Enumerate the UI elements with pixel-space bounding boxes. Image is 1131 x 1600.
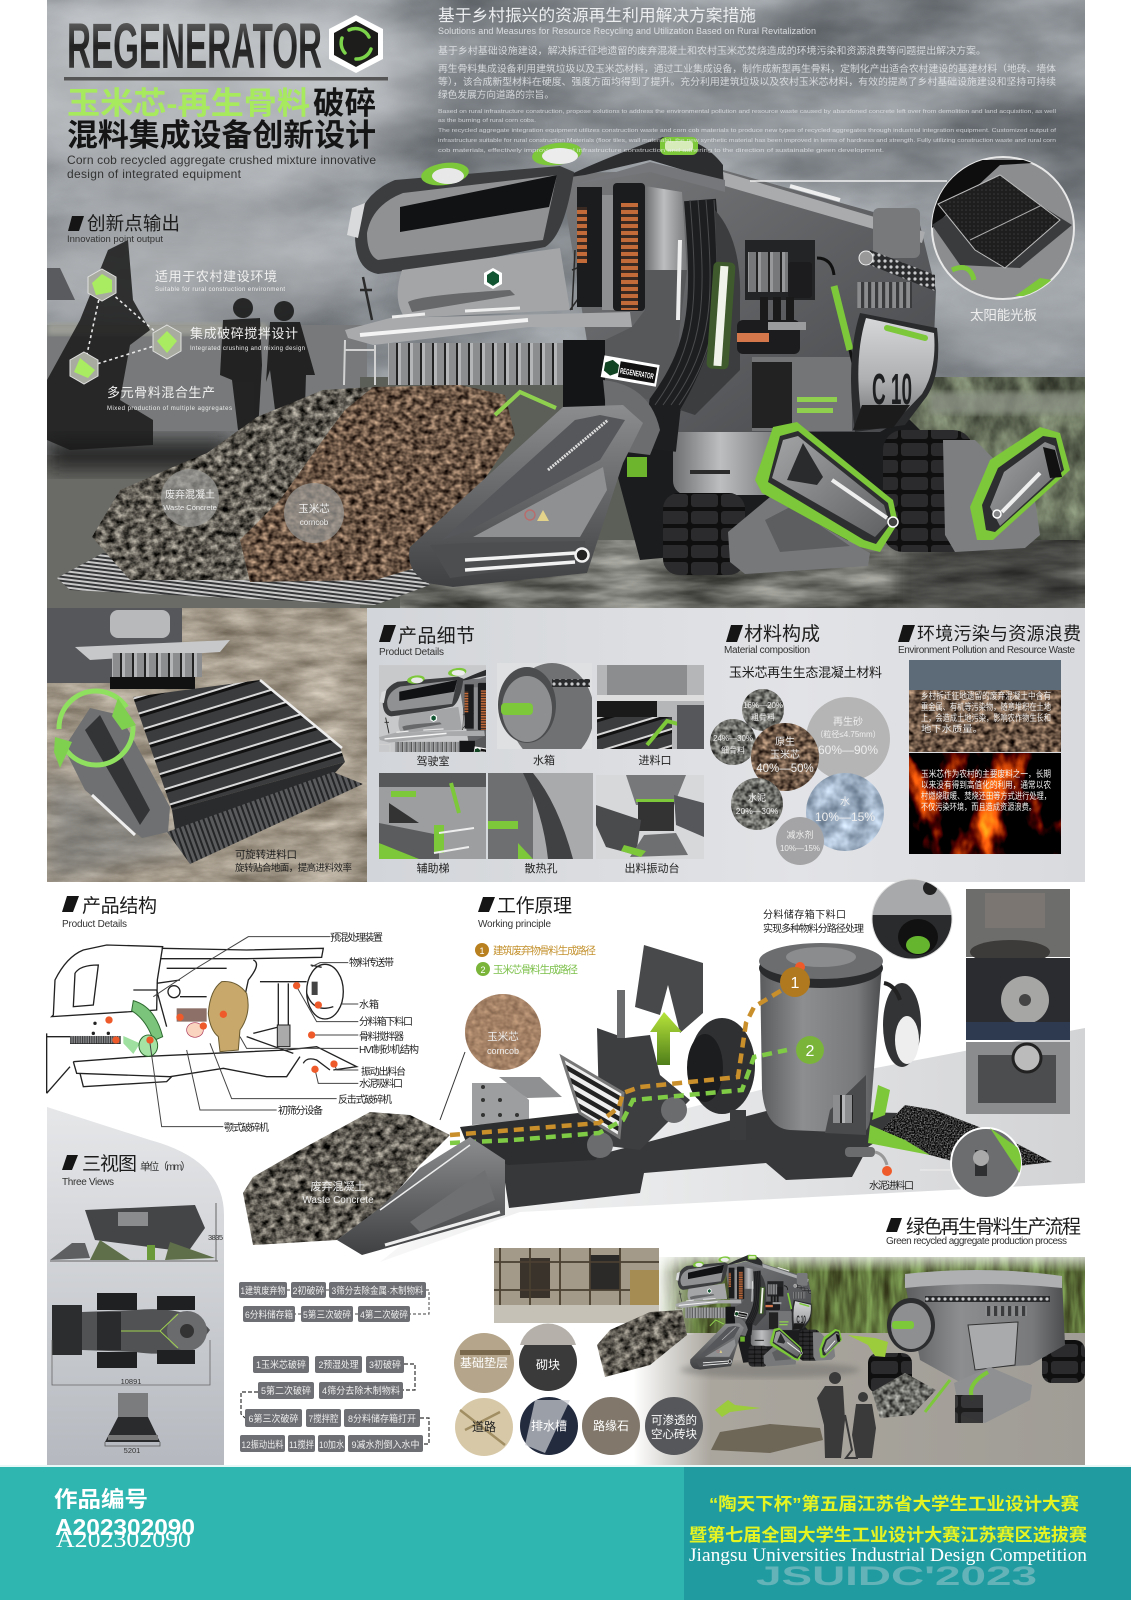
heading: working principle: 工作原理 (497, 895, 572, 917)
green discharge piece (872, 1085, 890, 1120)
gravel output (872, 1105, 1052, 1170)
competition title: 暨第七届全国大学生工业设计大赛江苏赛区选拔赛 (689, 1525, 1088, 1545)
circle: fine aggregate: 细骨料 (721, 745, 745, 755)
photo: demolition waste: 地下水质量。 (921, 723, 983, 734)
water panel (887, 1298, 935, 1352)
circle: water: 水 (840, 796, 850, 808)
circle: water reducer: 减水剂 (786, 829, 814, 840)
material title: 玉米芯再生生态混凝土材料 (729, 665, 882, 680)
circle: fine aggregate: 24%—30% (713, 734, 753, 743)
caption: rotating inlet: 旋转贴合地面，提高进料效率 (235, 862, 352, 874)
photo: burning corn cobs: 村燃烧取暖、焚烧还田等方式进行处理， (921, 790, 1051, 801)
side water wheel (883, 983, 921, 1067)
flow: corn cob process: 5第二次破碎 (261, 1385, 311, 1397)
striped chute (562, 1057, 623, 1137)
flow: corn cob process: 9减水剂倒入水中 (352, 1439, 420, 1451)
right track (1042, 1340, 1085, 1383)
point 3 text: 多元骨料混合生产 (107, 385, 215, 400)
circle: cement: 20%—30% (736, 806, 779, 816)
heading: three views: 三视图 (82, 1153, 137, 1175)
heading: product structure: 产品结构 (82, 895, 157, 917)
arrow: green transfer 1 (848, 1335, 888, 1357)
subtitle english (67, 153, 376, 181)
label circle: corncob: corncob (300, 518, 329, 527)
thumbnail: inlet: 进料口 (638, 753, 672, 767)
drawing: front view (105, 1393, 160, 1455)
water inlet pipe (845, 1147, 892, 1176)
heading: three views (62, 1153, 191, 1188)
thumbnail: vibrating discharge (596, 775, 704, 875)
circle: drain (520, 1397, 578, 1455)
marker 2: 2 (806, 1043, 815, 1060)
competition title: “陶天下杯”第五届江苏省大学生工业设计大赛 (709, 1494, 1080, 1514)
pile: waste concrete (92, 387, 390, 580)
circle: coarse aggregate: 16%—20% (743, 701, 783, 710)
structure labels: 振动出料台 (361, 1065, 406, 1078)
conveyor plate under pile (57, 553, 430, 605)
heading: green aggregate process: Green recycled aggregate production process (886, 1236, 1067, 1247)
heading: material composition: Material composition (724, 645, 810, 656)
circle: curb stone: 路缘石 (593, 1418, 629, 1433)
label: water inlet: 水泥进料口 (869, 1179, 914, 1192)
circle: curb stone (582, 1397, 640, 1455)
perforated plates (472, 1077, 562, 1125)
point 3 text: Mixed production of multiple aggregates (107, 406, 232, 412)
circle: original corn cob: 原生 (775, 735, 795, 748)
structure labels: 反击式破碎机 (338, 1093, 392, 1106)
flow: waste concrete process (239, 1282, 429, 1322)
panel: details and materials (367, 608, 1085, 882)
heading: green aggregate process (886, 1216, 1081, 1247)
heading: environmental pollution: Environment Pollution and Resource Waste (898, 645, 1075, 656)
pile: waste concrete input: Waste Concrete (302, 1195, 374, 1206)
circle: block (519, 1324, 577, 1391)
detail: water inlet (920, 1128, 1021, 1198)
point 1 text: Suitable for rural construction environment (155, 287, 285, 293)
photo: demolition waste: 乡村拆迁征地遗留的废弃混凝土中含有 (921, 690, 1051, 701)
work number (54, 1487, 195, 1552)
text block: solutions (438, 6, 1057, 154)
point 2 text (190, 326, 305, 352)
drawing: side view (50, 1203, 223, 1261)
flow: corn cob process: 2预湿处理 (318, 1359, 359, 1371)
path: green (450, 1050, 787, 1143)
path: orange (450, 990, 782, 1135)
flow: corn cob process: 10加水 (319, 1439, 344, 1451)
pile: waste concrete input: 废弃混凝土 (310, 1179, 366, 1193)
photo 1 (966, 889, 1070, 964)
title: 混料集成设备创新设计 (67, 118, 376, 153)
pile: rubble on small machine (597, 1310, 687, 1377)
marker 2 (796, 1036, 824, 1064)
structure labels: HVI制砂机结构 (359, 1043, 419, 1056)
text block: solutions: 再生骨料集成设备利用建筑垃圾以及玉米芯材料，通过工业集成设备，制作成新型再生骨料，定制化产出适合农村建设的基建材料（地砖、墙体 (438, 63, 1057, 75)
flow: corn cob process: 11搅拌 (289, 1439, 314, 1451)
drawing: front view: 5201 (124, 1446, 140, 1455)
photo: burning corn cobs (909, 753, 1061, 854)
text block: solutions: as the burning of rural corn cobs. (438, 118, 536, 124)
flow: corn cob process: 1玉米芯破碎 (256, 1359, 306, 1371)
flow: corn cob process (240, 1356, 429, 1452)
circle: water (806, 773, 884, 851)
heading: product details: 产品细节 (398, 625, 475, 647)
flow: corn cob process: 4筛分去除木制物料 (322, 1385, 400, 1397)
heading: product details (379, 625, 475, 658)
callout: corncob sample: corncob (487, 1046, 519, 1056)
heading: environmental pollution (898, 624, 1081, 656)
panel: three views background (47, 1107, 224, 1467)
crusher housing (597, 1028, 690, 1150)
title: 破碎 (313, 86, 376, 121)
structure labels: 水泥吸料口 (359, 1077, 403, 1090)
circle: road (455, 1398, 513, 1456)
callout: corncob sample: 玉米芯 (487, 1030, 519, 1043)
work number: A202302090 (56, 1527, 191, 1552)
flow: corn cob process: 7搅拌腔 (308, 1413, 339, 1425)
innovation points (70, 269, 305, 412)
point 3 text (107, 385, 232, 412)
drawing: side view: 3835 (208, 1233, 223, 1242)
circle: original corn cob (751, 723, 819, 791)
circle: water reducer (776, 817, 824, 865)
machine: exploded work mechanism (450, 943, 1052, 1208)
thumbnail: water tank: 水箱 (533, 753, 555, 767)
text: discharge port (763, 908, 864, 935)
photo 3 (966, 1042, 1070, 1114)
subtitle english: design of integrated equipment (67, 167, 242, 181)
drawing: top view (52, 1293, 210, 1386)
circle: permeable brick: 可渗透的 (651, 1413, 697, 1427)
corn field (655, 1250, 1085, 1335)
point 1 text: 适用于农村建设环境 (155, 269, 277, 284)
photo: demolition waste (909, 660, 1061, 752)
pile: waste concrete input (243, 1112, 450, 1245)
line drawing: structure diagram (47, 937, 358, 1127)
structure labels: 水箱 (359, 998, 379, 1011)
circle: coarse aggregate (742, 689, 784, 731)
flow: corn cob process: 3初破碎 (369, 1359, 401, 1371)
scene: green process (440, 1248, 1085, 1467)
icon: green rotate ring (54, 691, 136, 768)
circle: coarse aggregate: 粗骨料 (751, 712, 775, 722)
panel: hero scene (47, 0, 1085, 608)
label circle: waste concrete: Waste Concrete (163, 503, 217, 512)
flow: corn cob process: 6第三次破碎 (248, 1413, 299, 1425)
machine: regenerator vehicle (344, 137, 1070, 587)
photo: demolition waste: 上，会造成土地污染，影响农作物生长和 (921, 712, 1051, 723)
photo 2 (966, 958, 1070, 1040)
circle: cement (731, 778, 783, 830)
point 2 text: Integrated crushing and mixing design (190, 346, 305, 352)
flow: corn cob process: 8分料储存箱打开 (348, 1413, 416, 1425)
flow: waste concrete process: 1建筑废弃物 (240, 1285, 286, 1297)
work number: A202302090 (55, 1514, 195, 1540)
structure labels: 物料传送带 (349, 956, 394, 969)
heading: innovation: 创新点输出 (87, 213, 180, 234)
flow: waste concrete process: 3筛分去除金属·木制物料 (332, 1285, 424, 1297)
icon: hexagon point 3 (70, 352, 98, 384)
footer band (0, 1465, 1131, 1600)
thumbnail: cab: 驾驶室 (416, 754, 450, 768)
title: 玉米芯-再生骨料 (67, 86, 310, 121)
circle: recycled sand: 60%—90% (818, 743, 878, 757)
circle: water: 10%—15% (815, 810, 875, 824)
feed ramp rollers (133, 680, 345, 810)
thumbnail: inlet (597, 665, 704, 767)
green arrow (650, 1012, 682, 1065)
feed arm (337, 1137, 505, 1255)
thumbnail: ladder: 辅助梯 (416, 861, 450, 875)
text block: solutions: Solutions and Measures for Resource Recycling and Utilization Based on Rural Revitalization (438, 26, 816, 36)
legend: paths: 2 (480, 965, 486, 975)
text block: solutions: Based on rural infrastructure construction, propose solutions to address the environmental pollution and resource waste caused by abandoned concrete left over from demolition and land acquisition, as well (438, 109, 1056, 115)
structure labels (224, 931, 419, 1134)
circle: fine aggregate (710, 719, 756, 765)
structure labels: 分料箱下料口 (359, 1015, 413, 1028)
subtitle english: Corn cob recycled aggregate crushed mixture innovative (67, 153, 376, 167)
legend: paths (475, 943, 596, 976)
label circle: waste concrete (161, 469, 219, 527)
competition watermark: JSUIDC'2023 (756, 1561, 1037, 1591)
side guard (64, 708, 170, 838)
label: solar panel: 太阳能光板 (970, 308, 1038, 323)
workers silhouettes (220, 298, 315, 430)
text: discharge port: 分料储存箱下料口 (763, 908, 846, 921)
marker 1: 1 (791, 975, 800, 992)
left landscape (47, 268, 387, 608)
photo: burning corn cobs: 以来没有得到高值化的利用，通常以农 (921, 779, 1051, 790)
photo: burning corn cobs: 不仅污染环境，而且造成资源浪费。 (921, 801, 1036, 812)
construction photo (494, 1248, 659, 1323)
title (67, 86, 376, 153)
tank body (904, 1273, 1065, 1385)
rubble chute (872, 1373, 936, 1418)
excavator silhouette (47, 240, 153, 450)
text block: solutions: infrastructure suitable for rural construction Materials (floor tiles, wall materials), the new synthetic material has been improved in terms of hardness and strength. Fully utilizing construction waste and rural corn (438, 138, 1056, 144)
impact crusher drum (687, 1018, 755, 1140)
heading: environmental pollution: 环境污染与资源浪费 (917, 624, 1081, 644)
ribbed mat (167, 772, 363, 864)
thumbnail: vibrating discharge: 出料振动台 (624, 861, 680, 875)
heading: product details: Product Details (379, 647, 444, 658)
heading: three views: Three Views (62, 1177, 114, 1188)
material circles (454, 1324, 703, 1456)
heading: material composition: 材料构成 (744, 623, 820, 645)
legend: paths: 玉米芯骨料生成路径 (493, 963, 578, 976)
conveyor (460, 1113, 619, 1165)
callout: solar panel (750, 157, 1085, 299)
heading: green aggregate process: 绿色再生骨料生产流程 (906, 1216, 1081, 1238)
material circles chart (710, 689, 890, 865)
heading: material composition (724, 623, 820, 656)
structure labels: 颚式破碎机 (224, 1121, 269, 1134)
work number: 作品编号 (54, 1487, 148, 1512)
circle: water reducer: 10%—15% (780, 844, 820, 853)
photo: burning corn cobs: 玉米芯作为农村的主要废料之一，长期 (921, 768, 1051, 779)
text block: solutions: 等），该合成新型材料在硬度、强度方面均得到了提升。充分利用建筑垃圾以及农村玉米芯材料，有效的提高了乡村基础设施建设和坚持可持续 (438, 76, 1057, 88)
road ground (400, 530, 1085, 618)
structure labels: 预混处理装置 (330, 931, 383, 944)
sky background (47, 0, 1085, 420)
circle: permeable brick: 空心砖块 (651, 1427, 697, 1441)
right fields (850, 377, 1085, 567)
wedge (954, 1367, 1032, 1423)
competition english: Jiangsu Universities Industrial Design Competition (689, 1545, 1088, 1566)
thumbnail: heat vents (488, 773, 593, 875)
base platform (501, 1110, 905, 1208)
icon: hexagon recycle logo (329, 15, 383, 73)
text block: solutions: 基于乡村基础设施建设，解决拆迁征地遗留的废弃混凝土和农村玉米芯焚烧造成的环境污染和资源浪费等问题提出解决方案。 (438, 45, 986, 57)
flow: waste concrete process: 5第三次破碎 (303, 1309, 351, 1321)
photo: demolition waste: 重金属、有机等污染物，随意堆积在土地 (921, 701, 1051, 712)
thumbnail: ladder (379, 773, 486, 875)
ground (440, 1320, 1085, 1467)
structure labels: 骨料搅拌器 (359, 1030, 404, 1043)
door (968, 1322, 1018, 1370)
pile: corn cob (240, 385, 515, 582)
big machine (868, 1270, 1085, 1423)
circle: recycled sand: 再生砂 (833, 715, 863, 728)
hopper (635, 945, 703, 1033)
cab front (47, 608, 230, 689)
text block: solutions: The recycled aggregate integration equipment utilizes construction waste and corn cob materials to produce new types of recycled aggregates through industrial integration equipment. Customized output of (438, 128, 1056, 134)
circle: cement: 水泥 (748, 792, 766, 803)
label circle: corncob: 玉米芯 (298, 502, 330, 515)
thumbnail: heat vents: 散热孔 (524, 861, 558, 875)
flow: waste concrete process: 2初破碎 (292, 1285, 325, 1297)
flow: corn cob process: 12振动出料 (242, 1439, 284, 1451)
circle: drain: 排水槽 (531, 1419, 567, 1433)
rubble slabs (711, 1424, 823, 1453)
heading: product structure: Product Details (62, 919, 127, 930)
heading: innovation (67, 213, 180, 245)
workers (817, 1372, 876, 1458)
heading: innovation: Innovation point output (67, 234, 163, 245)
text: discharge port: 实现多种物料分路径处理 (763, 922, 864, 935)
heading: three views: 单位（mm） (140, 1160, 191, 1173)
circle: permeable brick (645, 1397, 703, 1455)
flow: waste concrete process: 4第二次破碎 (360, 1309, 408, 1321)
caption: rotating inlet: 可旋转进料口 (235, 848, 297, 861)
structure labels: 初筛分设备 (278, 1104, 323, 1117)
text block: solutions: 绿色发展方向道路的宗旨。 (438, 89, 554, 101)
label circle: waste concrete: 废弃混凝土 (165, 488, 215, 501)
heading: working principle (478, 895, 572, 930)
circle: road: 道路 (472, 1419, 496, 1434)
callout: corncob sample (440, 994, 541, 1120)
panel: lower background band (380, 1028, 1085, 1262)
tank (759, 943, 883, 1135)
thumbnail: water tank (497, 663, 594, 767)
thumbnail: cab (379, 665, 646, 832)
heading: working principle: Working principle (478, 919, 551, 930)
mid ground behind machine (360, 377, 1085, 608)
photos: real machines (966, 889, 1070, 1114)
caption: rotating inlet (235, 848, 352, 874)
panel: rotating inlet photo (47, 608, 367, 882)
label circle: corncob (284, 483, 344, 543)
circle: recycled sand (806, 697, 890, 781)
legend: paths: 1 (479, 946, 485, 956)
icon: hexagon point 1 (88, 269, 116, 301)
arrow: green transfer 2 (715, 1400, 761, 1417)
flow: waste concrete process: 6分料储存箱 (245, 1309, 293, 1321)
competition title (689, 1494, 1088, 1545)
text block: solutions: 基于乡村振兴的资源再生利用解决方案措施 (438, 6, 756, 25)
product logotype: REGENERATOR (67, 10, 322, 82)
icon: hexagon point 2 (153, 325, 181, 359)
detail: discharge port (872, 879, 960, 960)
drawing: top view: 10891 (121, 1377, 141, 1386)
point 2 text: 集成破碎搅拌设计 (190, 326, 298, 341)
text block: solutions: cob materials, effectively improving rural infrastructure construction and adhering to the direction of sustainable green development. (438, 148, 884, 154)
left track (868, 1353, 912, 1393)
small machine (675, 1255, 860, 1378)
circle: original corn cob: 40%—50% (756, 763, 814, 775)
marker 1 (780, 962, 810, 997)
circle: original corn cob: 玉米芯 (770, 748, 800, 761)
circle: base layer: 基础垫层 (460, 1355, 508, 1370)
circle: block: 砌块 (536, 1358, 560, 1372)
point 1 text (155, 269, 285, 293)
legend: paths: 建筑废弃物骨料生成路径 (493, 944, 596, 957)
circle: base layer (454, 1333, 514, 1393)
circle: recycled sand: （粒径≤4.75mm） (815, 729, 881, 739)
heading: product structure (62, 895, 157, 930)
